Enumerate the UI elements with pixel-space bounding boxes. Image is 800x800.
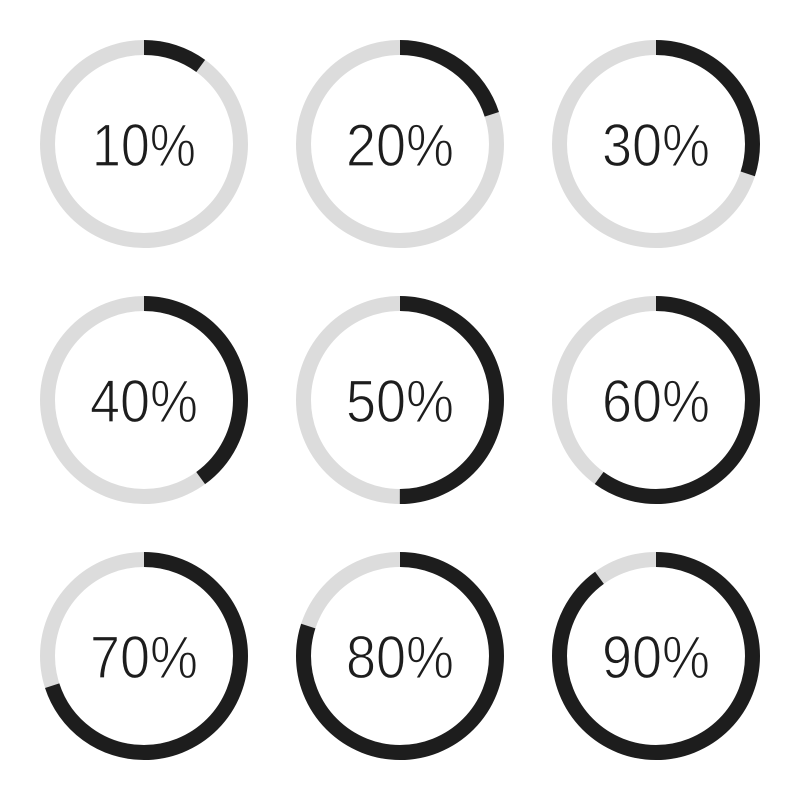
chart: 80%: 80%	[346, 624, 454, 691]
chart: 70%: 70%	[90, 624, 198, 691]
chart: 40%	[48, 304, 240, 496]
chart: 10%	[48, 48, 240, 240]
chart: 90%: 90%	[602, 624, 710, 691]
chart: 40%: 40%	[90, 368, 198, 435]
chart: 60%: 60%	[602, 368, 710, 435]
chart: 20%: 20%	[346, 112, 454, 179]
chart: 20%	[304, 48, 496, 240]
chart: 70%	[48, 560, 240, 752]
chart: 60%	[560, 304, 752, 496]
chart: 10%: 10%	[92, 112, 196, 179]
chart: 80%	[304, 560, 496, 752]
chart: 30%	[560, 48, 752, 240]
chart: 90%	[560, 560, 752, 752]
chart: 30%: 30%	[602, 112, 710, 179]
chart: 50%: 50%	[346, 368, 454, 435]
chart: 50%	[304, 304, 496, 496]
